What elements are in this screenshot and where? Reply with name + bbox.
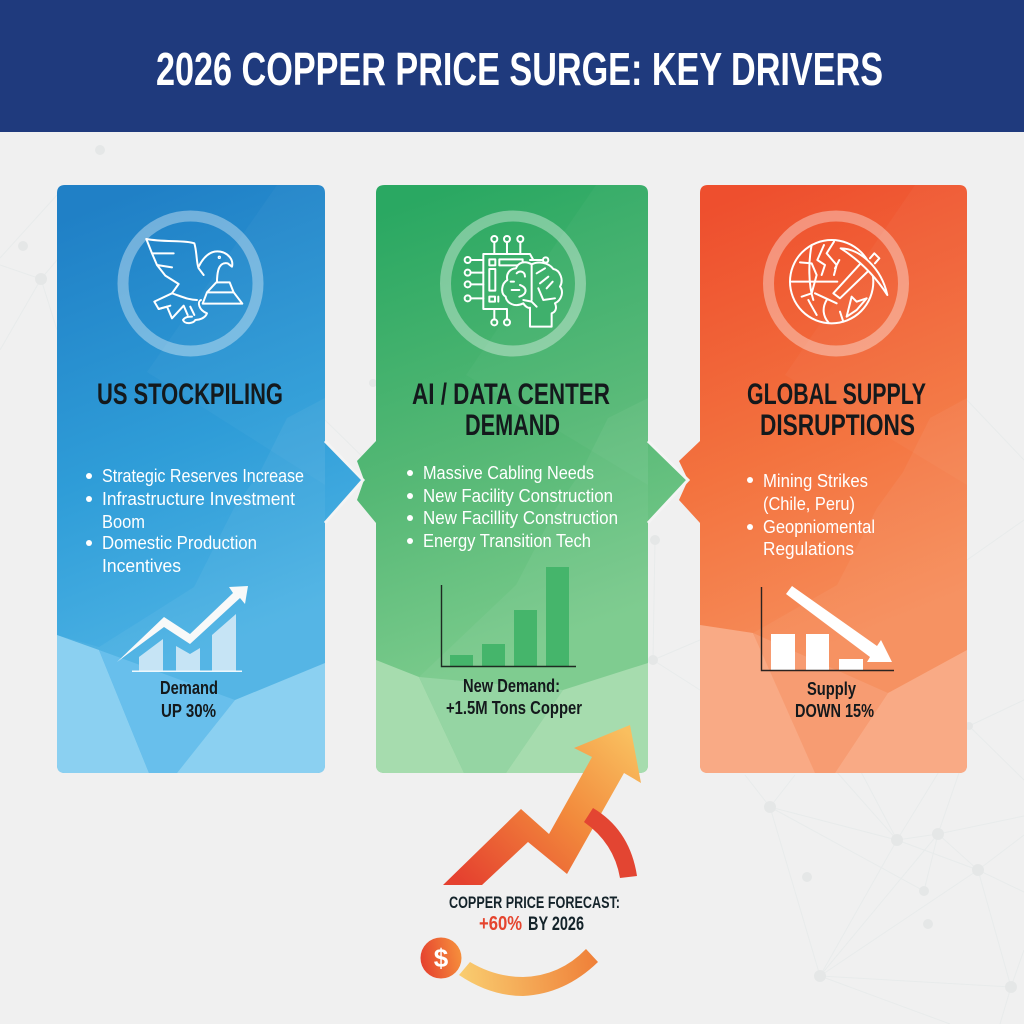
- icon: dollar coin: [420, 938, 462, 978]
- arrow: supply down: [786, 586, 892, 662]
- bullet list: (Chile, Peru): [763, 494, 855, 514]
- bar chart: supply falling: [762, 586, 894, 670]
- panel: global supply disruptions: [679, 185, 967, 773]
- icon ring: [446, 216, 580, 351]
- bullet list: [407, 463, 618, 551]
- bullet list: Strategic Reserves Increase: [102, 466, 304, 486]
- bullet list: New Facillity Construction: [423, 508, 618, 528]
- forecast text: COPPER PRICE FORECAST:: [449, 893, 620, 912]
- bullet list: Regulations: [763, 539, 854, 559]
- caption: [160, 677, 218, 721]
- bullet list: Geopniomental: [763, 517, 875, 537]
- header banner: [0, 0, 1024, 132]
- caption: New Demand:: [463, 675, 560, 696]
- bullet list: Domestic Production: [102, 533, 257, 553]
- caption: Supply: [807, 678, 857, 699]
- caption: Demand: [160, 677, 218, 698]
- heading: [747, 378, 926, 442]
- heading: DISRUPTIONS: [760, 409, 915, 442]
- bullet list: Boom: [102, 512, 145, 532]
- bullet list: New Facility Construction: [423, 486, 613, 506]
- arrow: copper price rising: [443, 725, 641, 885]
- icon: circuit chip and brain: [465, 236, 562, 327]
- chart: demand rising: [117, 586, 248, 672]
- icon ring: [768, 216, 904, 351]
- caption: DOWN 15%: [795, 700, 874, 721]
- heading: AI / DATA CENTER: [412, 378, 610, 411]
- heading: US STOCKPILING: [97, 378, 283, 411]
- caption: [795, 678, 874, 721]
- caption: UP 30%: [161, 700, 216, 721]
- heading: GLOBAL SUPPLY: [747, 378, 926, 411]
- icon: eagle holding copper ingot: [146, 239, 242, 323]
- forecast text: BY 2026: [528, 914, 584, 935]
- forecast text: [449, 893, 620, 935]
- heading: [412, 378, 610, 442]
- bar chart: new demand: [442, 567, 576, 666]
- bullet list: [747, 471, 875, 559]
- icon ring: [123, 216, 258, 351]
- orange gauge arc: [459, 949, 598, 996]
- bullet list: Mining Strikes: [763, 471, 868, 491]
- caption: [446, 675, 582, 718]
- bullet list: [86, 466, 304, 576]
- bullet list: Massive Cabling Needs: [423, 463, 594, 483]
- bullet list: Infrastructure Investment: [102, 489, 295, 509]
- icon: cracked globe and pickaxe: [790, 240, 887, 323]
- icon: dollar coin: $: [434, 943, 449, 973]
- forecast graphic: [420, 725, 641, 996]
- bullet list: Incentives: [102, 556, 181, 576]
- bullet list: Energy Transition Tech: [423, 531, 591, 551]
- forecast text: +60%: [479, 913, 522, 935]
- red gauge arc: [584, 808, 637, 878]
- panel: US stockpiling: [57, 185, 363, 773]
- arrow: demand up: [117, 586, 248, 662]
- panel: AI and data center demand: [357, 185, 688, 773]
- heading: DEMAND: [465, 409, 560, 442]
- caption: +1.5M Tons Copper: [446, 697, 582, 718]
